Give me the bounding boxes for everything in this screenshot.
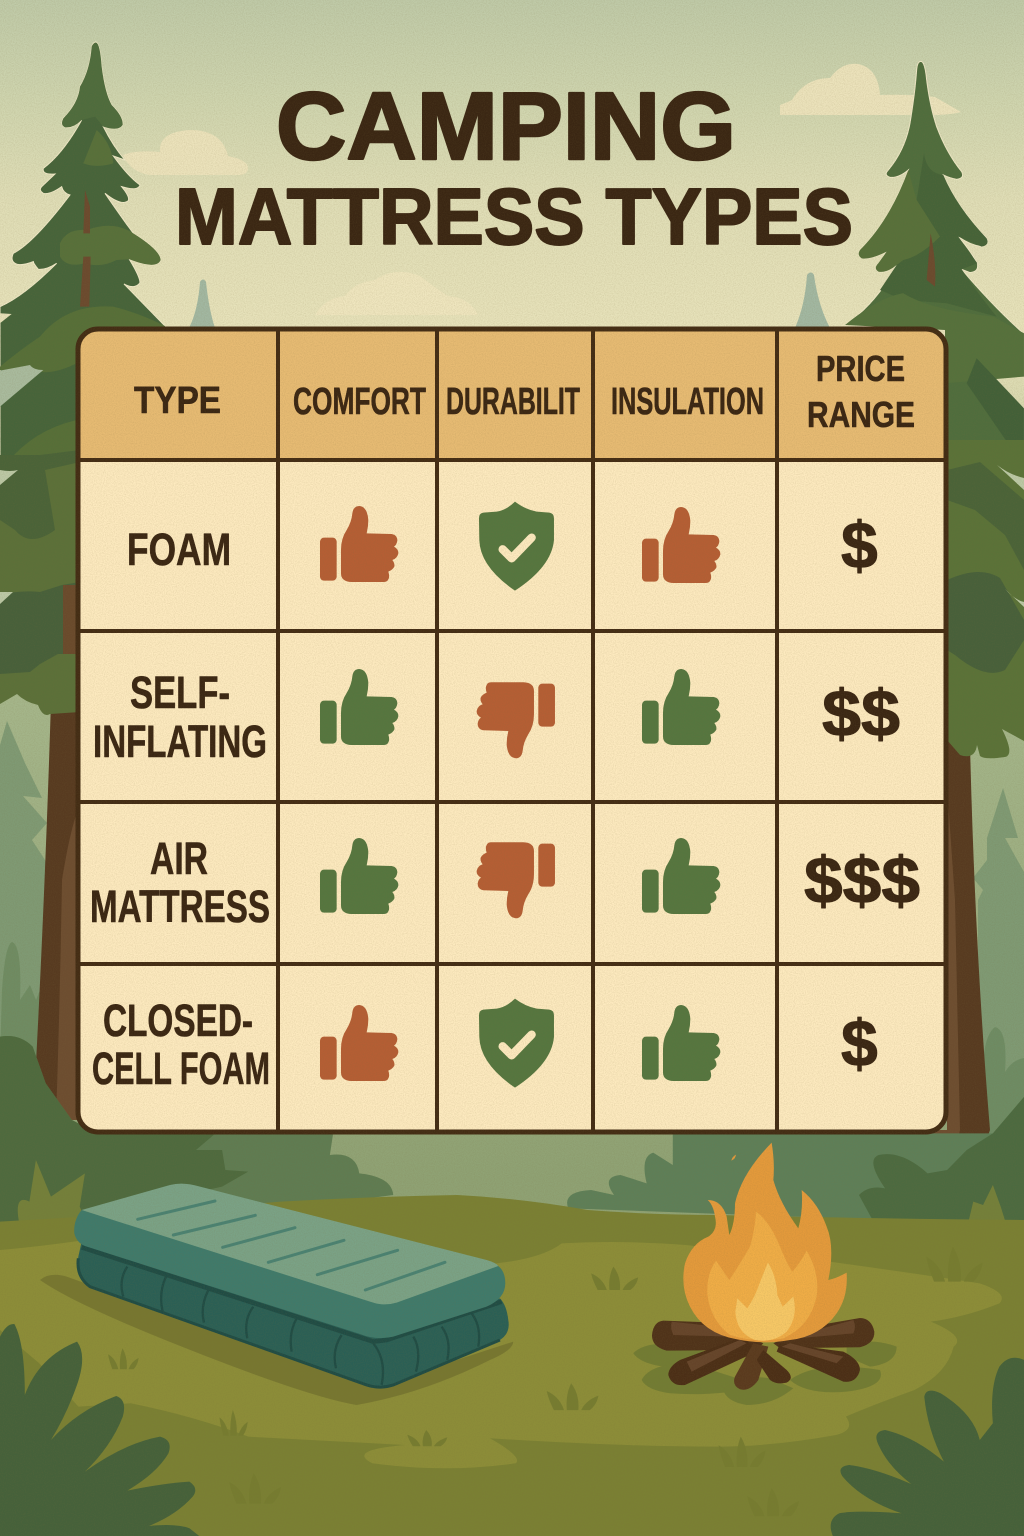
table background (78, 329, 946, 1132)
foreground plant: bottom left (0, 1324, 199, 1536)
title (175, 73, 853, 261)
bush: left dark (0, 1036, 248, 1225)
header row (134, 348, 915, 435)
label: SELF- (130, 667, 230, 718)
mattress upper side (74, 1210, 505, 1338)
mattress shadow (40, 1275, 513, 1405)
campfire illustration (633, 1143, 897, 1405)
mattress stitch lines (138, 1201, 445, 1290)
lower foliage (947, 440, 1024, 758)
distant tree left (0, 721, 47, 1060)
mattress baffle lines (78, 1247, 502, 1387)
header: price range: RANGE (807, 394, 915, 435)
mattress illustration (40, 1184, 513, 1405)
cloud: left (123, 130, 248, 175)
logs (652, 1318, 874, 1390)
price: $ (841, 508, 878, 582)
tree: left (0, 42, 165, 1120)
foreground plant: bottom right (831, 1358, 1024, 1536)
icon: comfort thumbs up (320, 669, 398, 745)
trunk (33, 700, 80, 1120)
label: MATTRESS (90, 881, 270, 932)
mattress lower layer (78, 1242, 509, 1387)
label: AIR (150, 833, 208, 884)
row: self-inflating (93, 667, 900, 767)
cloud: upper right (780, 64, 961, 115)
icon: durability thumbs down (477, 842, 555, 918)
flame outer (683, 1143, 847, 1342)
fire shadows (633, 1342, 897, 1405)
cloud: centre (315, 272, 478, 315)
icon: insulation thumbs up (642, 838, 720, 914)
lower scene: ground and bushes (0, 1036, 1024, 1536)
flame inner (735, 1263, 795, 1341)
ground (0, 1195, 1024, 1536)
crown foliage (845, 61, 1024, 483)
icon: comfort thumbs up (320, 506, 398, 582)
distant shrub right (983, 1027, 1024, 1150)
title line 2: MATTRESS TYPES (175, 172, 853, 261)
label: INFLATING (93, 716, 267, 767)
distant shrub left (0, 942, 42, 1060)
icon: comfort thumbs up (320, 1005, 398, 1081)
header: insulation: INSULATION (611, 381, 764, 423)
header: type: TYPE (134, 380, 221, 422)
icon: insulation thumbs up (642, 507, 720, 583)
price: $$ (822, 676, 900, 750)
bush: right mid (567, 1133, 1024, 1225)
icon: insulation thumbs up (642, 1005, 720, 1081)
price: $ (841, 1006, 878, 1080)
table header band (78, 329, 946, 460)
crown foliage (0, 42, 165, 463)
bush: right dark (859, 1097, 1024, 1225)
row: air mattress (90, 833, 920, 932)
header: price range: PRICE (816, 348, 905, 389)
icon: comfort thumbs up (320, 838, 398, 914)
lower foliage (0, 450, 80, 715)
title line 1: CAMPING (276, 73, 736, 180)
icon: insulation thumbs up (642, 669, 720, 745)
table grid (78, 329, 946, 1132)
bush tuft: left (18, 1160, 88, 1225)
label: CLOSED- (103, 995, 253, 1046)
header: durability: DURABILIT (446, 381, 580, 423)
grass tufts (108, 1247, 983, 1516)
row: closed-cell foam (92, 995, 878, 1094)
row: foam (127, 502, 878, 591)
ground light patch (0, 1240, 1002, 1468)
comparison table (78, 329, 946, 1132)
distant tree right (973, 788, 1024, 1110)
label: CELL FOAM (92, 1043, 270, 1094)
bush: left mid (0, 1036, 393, 1225)
bush tuft: right (968, 1185, 1006, 1223)
tree: right (845, 61, 1024, 1173)
distant tree tips (189, 272, 830, 328)
icon: durability shield (479, 502, 554, 591)
icon: durability shield (479, 999, 554, 1088)
mattress top (82, 1184, 498, 1304)
icon: durability thumbs down (477, 682, 555, 758)
header: comfort: COMFORT (293, 381, 426, 423)
label: FOAM (127, 524, 231, 575)
price: $$$ (804, 843, 920, 917)
flame mid (707, 1212, 817, 1340)
spark (731, 1155, 736, 1161)
trunk (920, 740, 990, 1173)
